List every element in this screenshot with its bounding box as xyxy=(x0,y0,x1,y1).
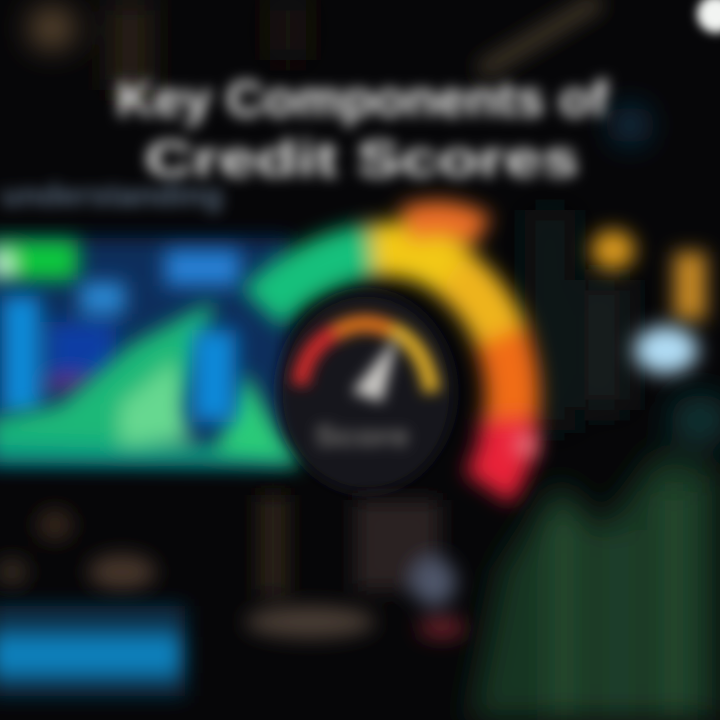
gauge xyxy=(278,292,454,492)
right side lights xyxy=(591,230,706,374)
green screen highlight xyxy=(0,240,78,280)
title: Key Components of xyxy=(116,71,608,127)
blue bar in front of chart xyxy=(192,330,236,422)
subtitle: understanding xyxy=(1,177,223,213)
gauge label: Score xyxy=(314,420,410,453)
gauge needle xyxy=(352,335,398,402)
lower blue screen xyxy=(0,606,185,696)
rainbow score arc xyxy=(262,219,512,488)
chart screen xyxy=(0,238,300,466)
gauge dial body xyxy=(278,292,454,492)
ceiling light xyxy=(697,0,720,33)
title xyxy=(116,71,608,187)
ceiling beam xyxy=(480,0,600,72)
plant xyxy=(470,394,720,720)
title: Credit Scores xyxy=(145,131,579,187)
amber lantern xyxy=(674,252,706,320)
gauge colored scale xyxy=(300,324,432,392)
background room details xyxy=(30,0,646,430)
lower shelf objects xyxy=(0,495,466,638)
pale blue light xyxy=(634,326,698,374)
red end highlight xyxy=(515,434,537,456)
green mountain chart xyxy=(0,300,300,466)
amber light xyxy=(591,230,635,270)
blue bars xyxy=(2,250,240,414)
